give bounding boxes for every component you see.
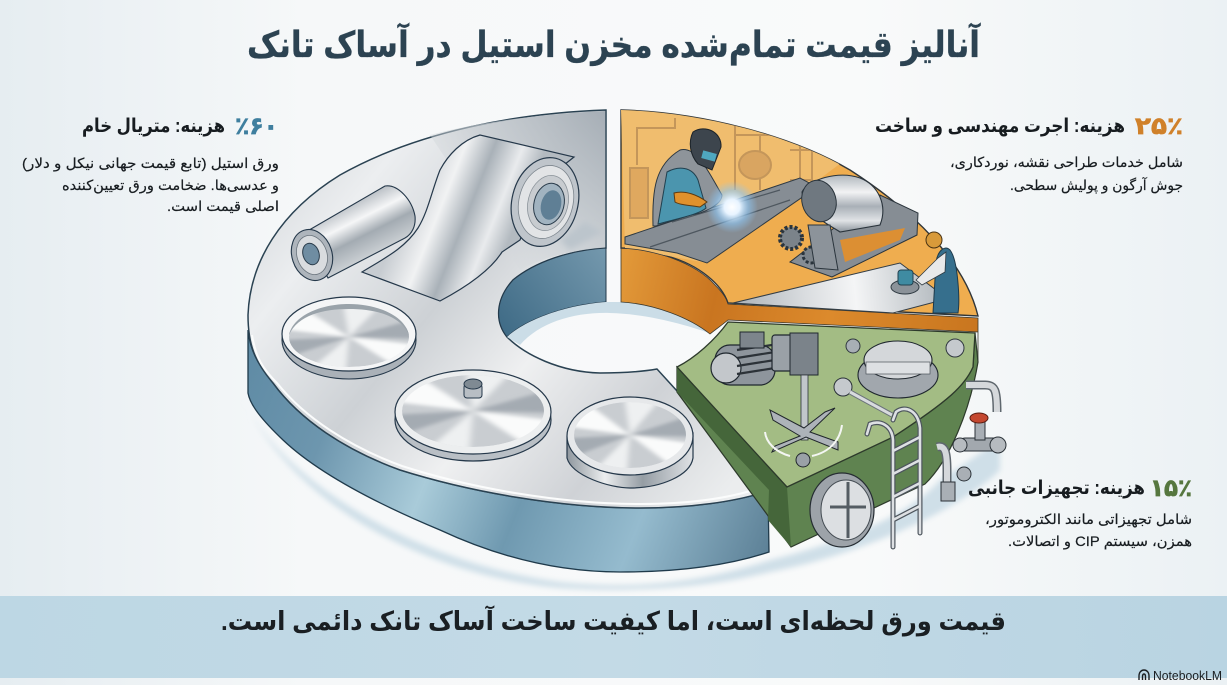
25 percent heading: هزینه: اجرت مهندسی و ساخت	[875, 116, 1125, 137]
icon: steel dish end	[282, 297, 416, 379]
green dark front-left face	[677, 367, 791, 547]
callout: 25 percent labour	[875, 113, 1183, 194]
welder figure	[653, 129, 722, 226]
title: آنالیز قیمت تمام‌شده مخزن استیل در آساک تانک	[247, 22, 981, 66]
callout: 60 percent raw material	[22, 113, 279, 214]
panel: steel slice 60 percent	[248, 110, 769, 572]
pie chart shadow	[244, 400, 1000, 590]
welding spark	[706, 181, 758, 233]
15 percent body text: شامل تجهیزاتی مانند الکتروموتور،	[985, 511, 1192, 528]
15 percent body text: همزن، سیستم CIP و اتصالات.	[1008, 533, 1192, 550]
callout: 15 percent auxiliary equipment	[968, 475, 1192, 550]
25 percent figure: ۲۵٪	[1135, 113, 1183, 140]
60 percent body text: ورق استیل (تابع قیمت جهانی نیکل و دلار)	[22, 155, 279, 172]
panel: orange slice 25 percent	[621, 110, 978, 362]
green top face	[677, 322, 975, 487]
60 percent body text: اصلی قیمت است.	[167, 198, 279, 214]
icon: steel disc	[567, 397, 693, 488]
factory pipes backdrop	[630, 118, 812, 218]
60 percent heading: هزینه: متریال خام	[82, 116, 225, 137]
access ladder	[867, 409, 920, 547]
15 percent figure: ۱۵٪	[1150, 475, 1192, 502]
icon: small steel roll	[285, 186, 415, 286]
60 percent body text	[22, 155, 279, 214]
steel top tint	[430, 111, 605, 270]
NotebookLM logo: NotebookLM	[1153, 669, 1222, 683]
steel top face	[248, 110, 768, 508]
green side walls	[677, 333, 978, 547]
steel inner hole wall	[499, 248, 606, 337]
plate rolling machine	[780, 175, 918, 277]
icon: domed lid with nozzle	[395, 370, 551, 461]
conclusion banner	[0, 596, 1227, 678]
hole shadow	[507, 302, 712, 345]
CIP spray ball and pipe	[834, 378, 892, 415]
icon: large coil floor shadow	[560, 222, 602, 250]
orange inner wall	[621, 248, 978, 362]
25 percent body text: شامل خدمات طراحی نقشه، نوردکاری،	[950, 154, 1183, 171]
60 percent body text: و عدسی‌ها. ضخامت ورق تعیین‌کننده	[62, 177, 279, 194]
15 percent heading: هزینه: تجهیزات جانبی	[968, 478, 1145, 499]
steel plate being welded	[625, 178, 817, 263]
steel outer side wall	[248, 330, 769, 572]
60 percent figure: ٪۶۰	[235, 113, 278, 140]
manway hatch on top	[846, 339, 964, 398]
electric motor	[711, 332, 818, 385]
15 percent body text	[985, 511, 1192, 550]
icon: NotebookLM	[1139, 670, 1149, 680]
agitator impeller	[765, 375, 842, 467]
25 percent body text	[950, 154, 1183, 194]
icon: large steel coil with unrolled sheet	[362, 135, 588, 301]
panel: green slice 15 percent	[677, 322, 1006, 547]
orange top-left scene backdrop	[621, 110, 860, 263]
orange top face	[621, 110, 978, 316]
process pipes and valve	[937, 385, 1006, 501]
25 percent body text: جوش آرگون و پولیش سطحی.	[1010, 177, 1183, 194]
polishing table and worker	[733, 232, 959, 313]
conclusion text: قیمت ورق لحظه‌ای است، اما کیفیت ساخت آساک تانک دائمی است.	[221, 605, 1006, 637]
steel edge bevel	[252, 335, 760, 504]
side manway door	[810, 473, 874, 547]
